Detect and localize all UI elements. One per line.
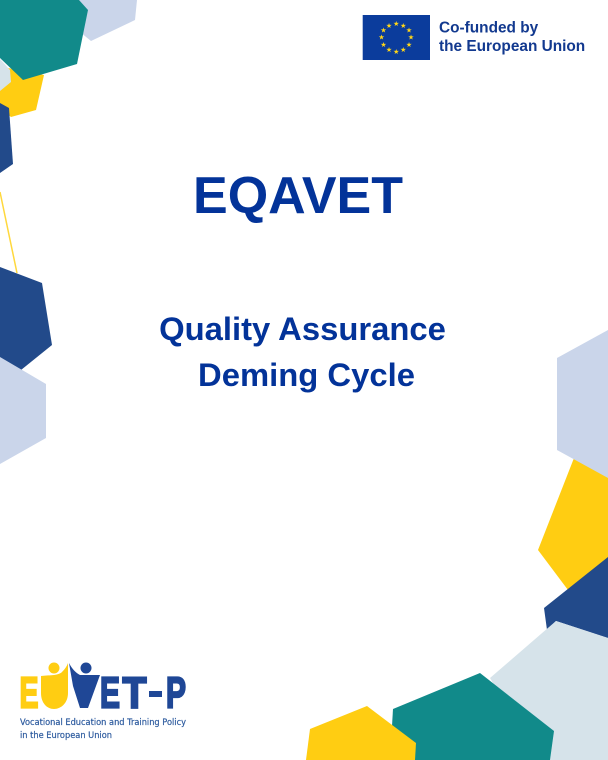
flag stars: ★ bbox=[386, 22, 392, 30]
flag stars: ★ bbox=[393, 20, 399, 28]
hexagons: top-left cluster bbox=[0, 0, 137, 173]
logo letter E: E bbox=[20, 668, 38, 718]
thin yellow line bbox=[0, 192, 17, 273]
flag stars: ★ bbox=[408, 34, 414, 42]
logo U figure bbox=[41, 662, 68, 709]
co-funded text: the European Union bbox=[439, 38, 585, 55]
flag stars: ★ bbox=[406, 26, 412, 34]
hexagons: left-middle cluster bbox=[0, 267, 52, 464]
subtitle bbox=[159, 310, 446, 393]
flag stars: ★ bbox=[406, 41, 412, 49]
hexagons: bottom right cluster bbox=[306, 621, 608, 760]
flag stars: ★ bbox=[386, 46, 392, 54]
flag stars: ★ bbox=[400, 22, 406, 30]
co-funded text bbox=[439, 20, 585, 55]
logo tagline bbox=[20, 718, 186, 741]
subtitle: Deming Cycle bbox=[198, 356, 415, 393]
title: EQAVET bbox=[193, 167, 403, 225]
logo tagline: in the European Union bbox=[20, 731, 112, 741]
flag stars: ★ bbox=[380, 26, 387, 34]
logo V figure bbox=[69, 662, 100, 708]
logo tagline: Vocational Education and Training Policy bbox=[20, 718, 186, 728]
logo letters ET-P: P bbox=[166, 668, 186, 718]
logo letters ET-P: E bbox=[100, 668, 120, 718]
hexagons: right side cluster bbox=[538, 330, 608, 638]
logo letters ET-P: T bbox=[122, 668, 147, 718]
flag stars: ★ bbox=[378, 34, 385, 42]
logo letters ET-P bbox=[100, 668, 186, 718]
flag stars: ★ bbox=[400, 46, 406, 54]
flag stars bbox=[378, 20, 414, 56]
flag stars: ★ bbox=[380, 41, 387, 49]
EU flag emblem bbox=[363, 15, 430, 60]
flag stars: ★ bbox=[393, 48, 399, 56]
EUVET-P logo bbox=[20, 662, 186, 741]
subtitle: Quality Assurance bbox=[159, 310, 446, 347]
logo dash bbox=[149, 691, 162, 697]
co-funded text: Co-funded by bbox=[439, 20, 539, 36]
